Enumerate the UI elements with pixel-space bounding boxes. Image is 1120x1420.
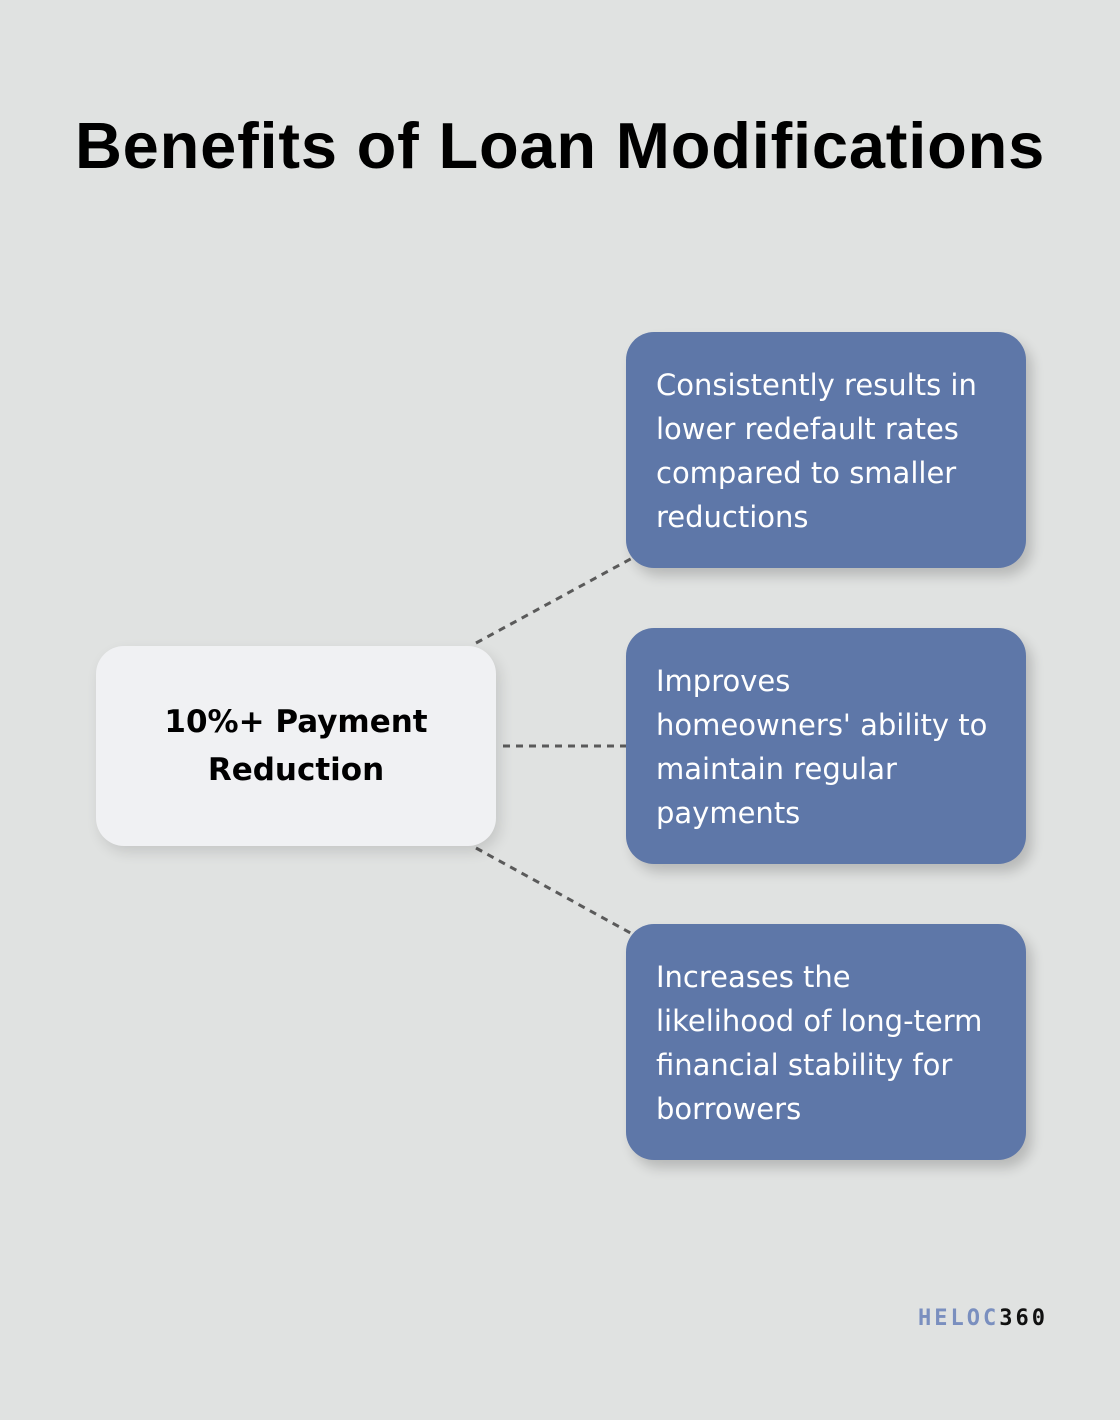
box 2 — [626, 628, 1026, 864]
box 3: Increases the — [656, 960, 851, 994]
box 2: maintain regular — [656, 752, 897, 786]
box 3: financial stability for — [656, 1048, 952, 1082]
center node: Reduction — [208, 752, 384, 788]
center node — [96, 646, 496, 846]
box 2: homeowners' ability to — [656, 708, 987, 742]
logo: HELOC360 — [918, 1306, 1048, 1331]
title: Benefits of Loan Modifications — [75, 109, 1045, 182]
box 3 — [626, 924, 1026, 1160]
box 2: payments — [656, 796, 800, 830]
box 1 — [626, 332, 1026, 568]
box 1: compared to smaller — [656, 456, 956, 490]
box 3: borrowers — [656, 1092, 801, 1126]
box 2: Improves — [656, 664, 790, 698]
center node: 10%+ Payment — [164, 704, 428, 740]
box 1: Consistently results in — [656, 368, 977, 402]
box 1: reductions — [656, 500, 809, 534]
box 1: lower redefault rates — [656, 412, 959, 446]
box 3: likelihood of long-term — [656, 1004, 982, 1038]
